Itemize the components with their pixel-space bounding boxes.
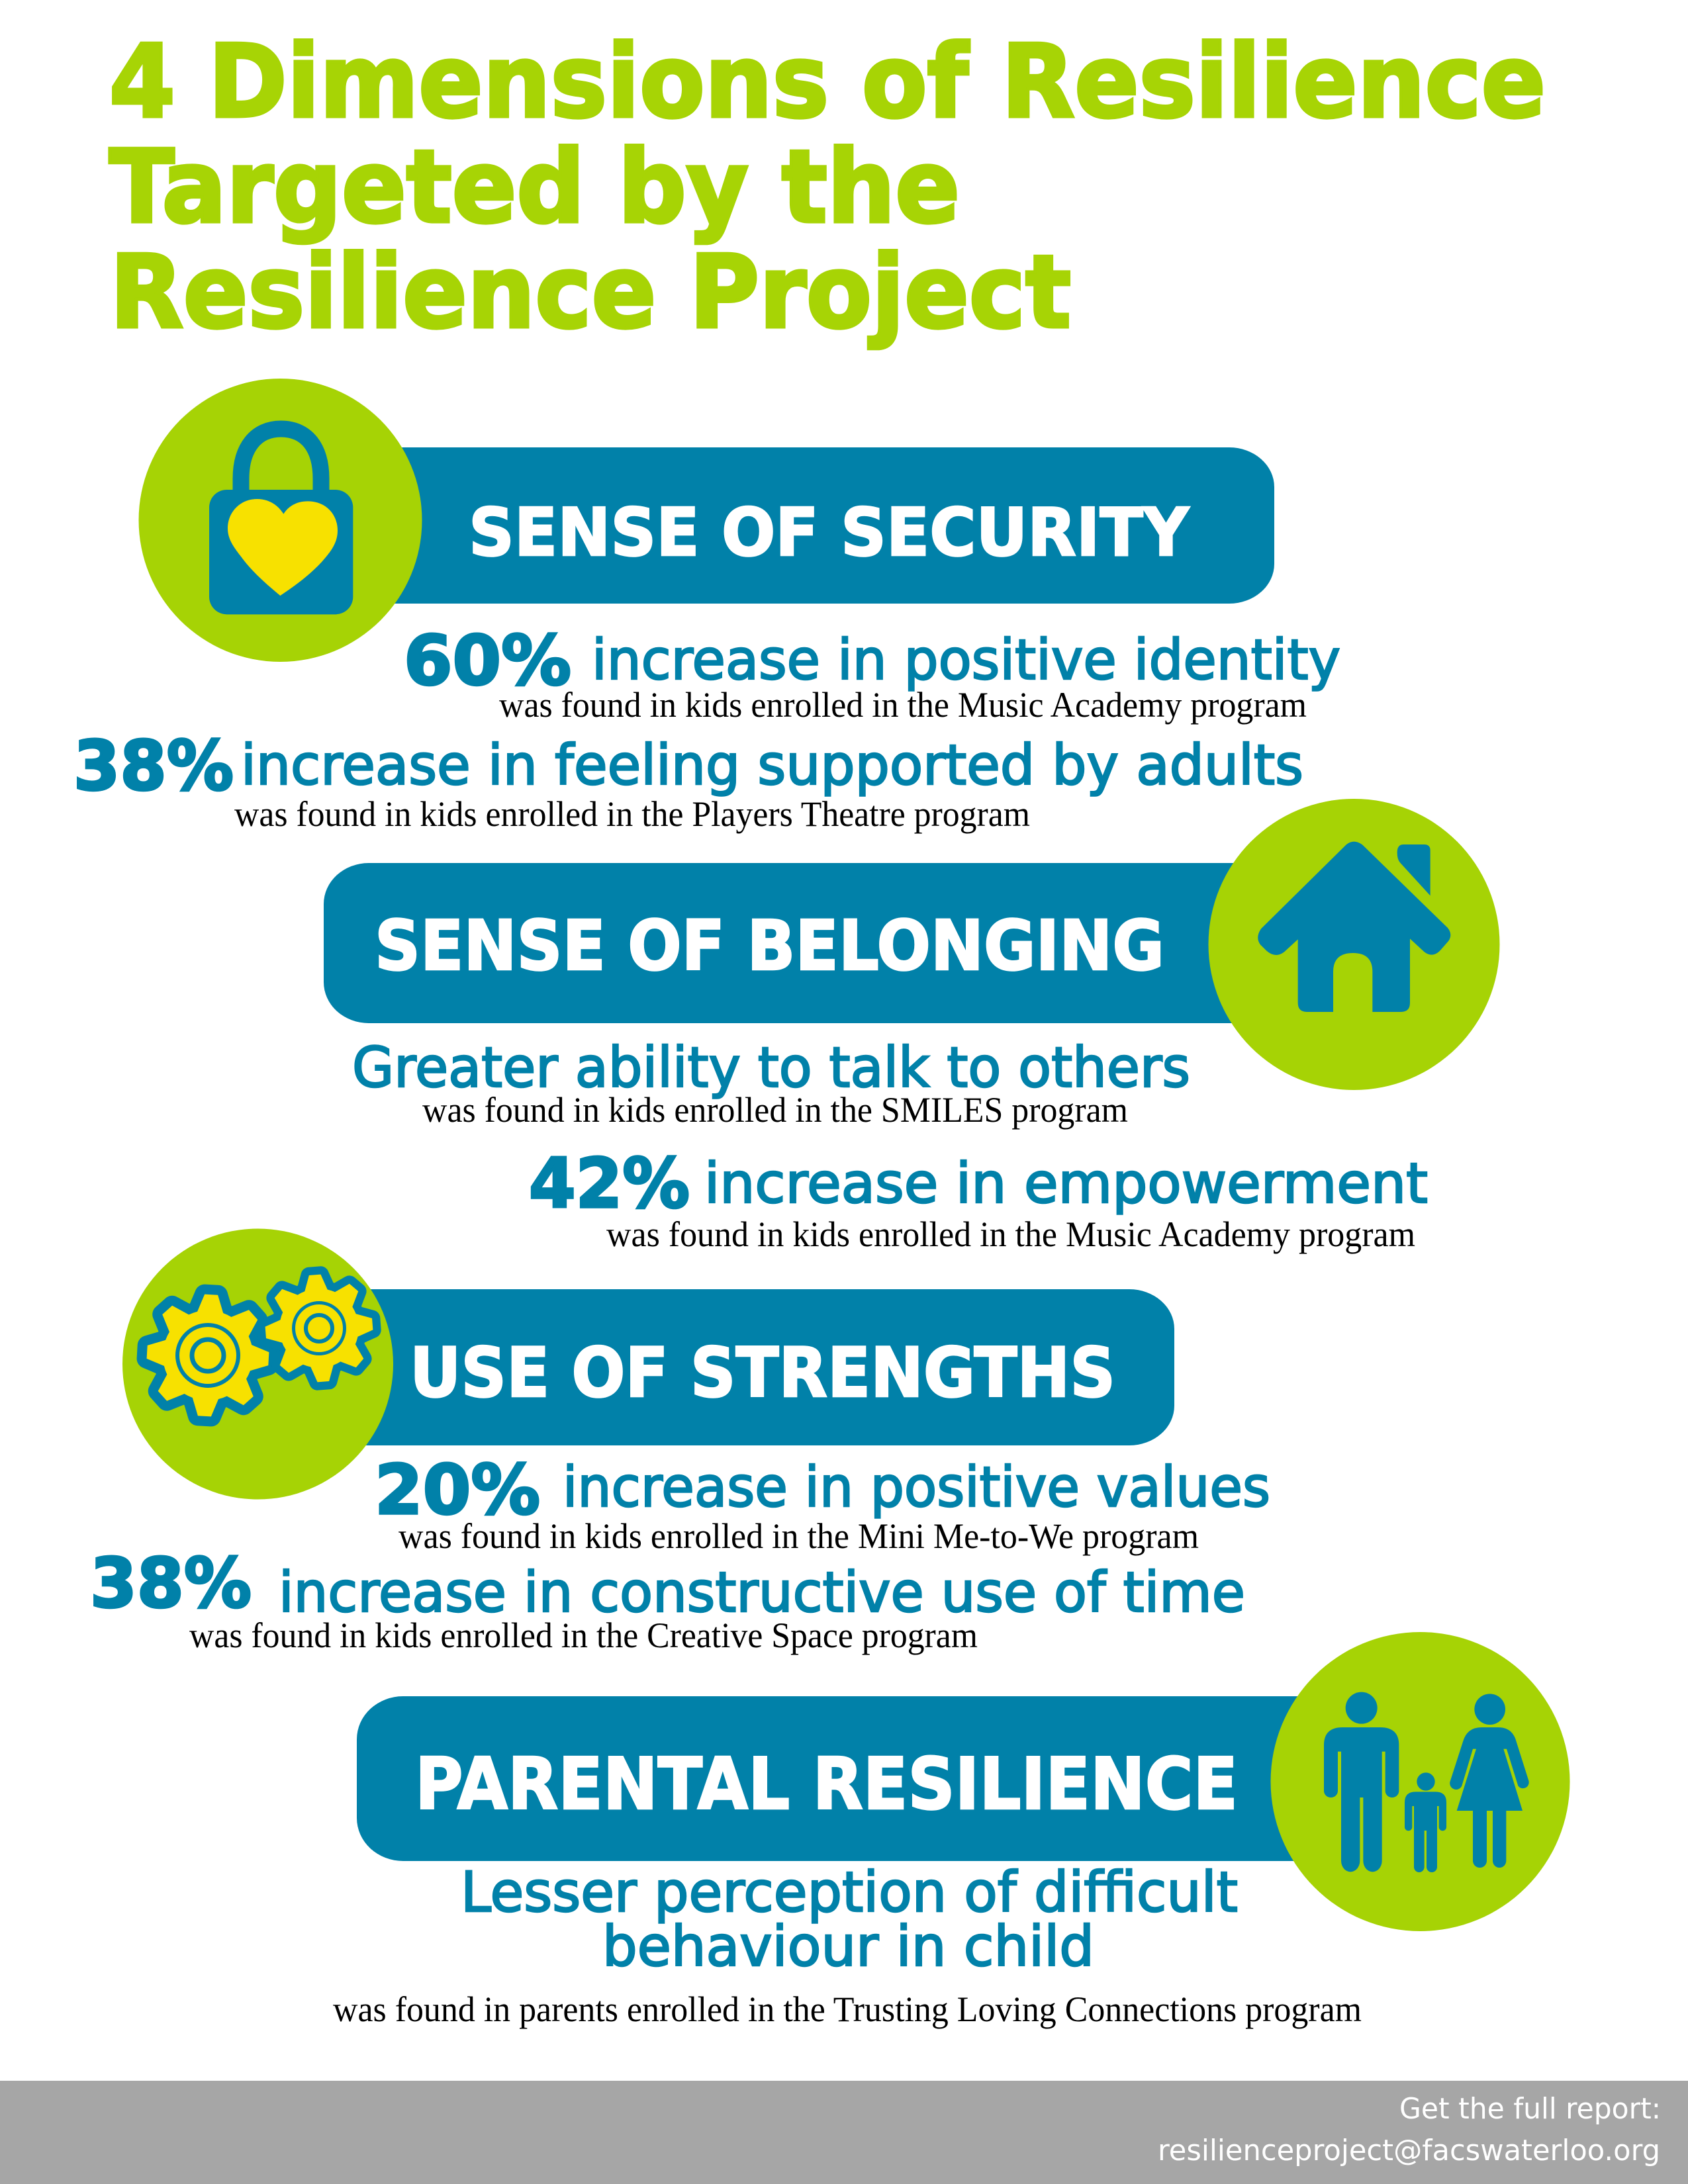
stat: 60% positive identity (404, 621, 1340, 725)
stat: lesser perception of difficult behaviour: Lesser perception of difficult (461, 1860, 1238, 1925)
panel: sense of security (73, 379, 1340, 834)
stat: 38% constructive use of time: was found in kids enrolled in the Creative Space program (189, 1615, 978, 1655)
title (109, 23, 1546, 351)
banner: parental resilience (357, 1696, 1423, 1861)
stat: 38% constructive use of time (90, 1544, 1245, 1655)
panel: use of strengths (90, 1228, 1270, 1655)
panel: parental resilience (333, 1632, 1570, 2029)
footer: Get the full report: (1399, 2092, 1661, 2126)
banner: use of strengths: USE OF STRENGTHS (410, 1334, 1115, 1413)
stat: 20% positive values: increase in positive values (563, 1455, 1270, 1520)
stat: 20% positive values: 20% (375, 1451, 540, 1530)
stat: 38% supported by adults: increase in feeling supported by adults (241, 733, 1303, 797)
stat: greater ability to talk: was found in kids enrolled in the SMILES program (422, 1090, 1128, 1130)
icon: house (1209, 799, 1500, 1090)
stat: greater ability to talk: Greater ability to talk to others (352, 1035, 1190, 1100)
stat: 60% positive identity: increase in positive identity (592, 627, 1340, 692)
stat: lesser perception of difficult behaviour: was found in parents enrolled in the Trusting Loving Connections program (333, 1989, 1362, 2029)
stat: 20% positive values (375, 1451, 1270, 1556)
stat: 60% positive identity: was found in kids enrolled in the Music Academy program (499, 685, 1307, 725)
title: 4 Dimensions of Resilience (109, 23, 1546, 140)
banner: parental resilience: PARENTAL RESILIENCE (415, 1743, 1238, 1826)
stat: 38% supported by adults (73, 727, 1303, 834)
footer: resilienceproject@facswaterloo.org (1158, 2134, 1660, 2167)
footer (0, 2081, 1688, 2184)
stat: 38% supported by adults: was found in kids enrolled in the Players Theatre program (234, 794, 1030, 834)
icon: family (1271, 1632, 1570, 1931)
stat: 42% empowerment: 42% (529, 1144, 690, 1224)
banner: sense of belonging (324, 863, 1356, 1023)
stat: 38% supported by adults: 38% (73, 727, 234, 806)
stat: 60% positive identity: 60% (404, 621, 571, 701)
banner: sense of security (265, 447, 1274, 604)
title: Resilience Project (110, 234, 1071, 351)
stat: 38% constructive use of time: increase in constructive use of time (279, 1560, 1245, 1625)
stat: 42% empowerment: was found in kids enrolled in the Music Academy program (606, 1214, 1415, 1254)
icon: padlock with heart (139, 379, 422, 662)
icon: gears (122, 1228, 393, 1500)
banner: sense of belonging: SENSE OF BELONGING (375, 905, 1164, 986)
stat: 42% empowerment: increase in empowerment (704, 1151, 1428, 1216)
stat: 38% constructive use of time: 38% (90, 1544, 252, 1623)
stat: lesser perception of difficult behaviour: behaviour in child (602, 1914, 1094, 1979)
stat: lesser perception of difficult behaviour (333, 1860, 1362, 2029)
stat: greater ability to talk (352, 1035, 1190, 1130)
panel: sense of belonging (324, 799, 1500, 1254)
banner: sense of security: SENSE OF SECURITY (469, 494, 1190, 571)
stat: 42% empowerment (529, 1144, 1428, 1254)
stat: 20% positive values: was found in kids enrolled in the Mini Me-to-We program (399, 1516, 1199, 1556)
title: Targeted by the (109, 128, 960, 246)
banner: use of strengths (265, 1289, 1174, 1445)
